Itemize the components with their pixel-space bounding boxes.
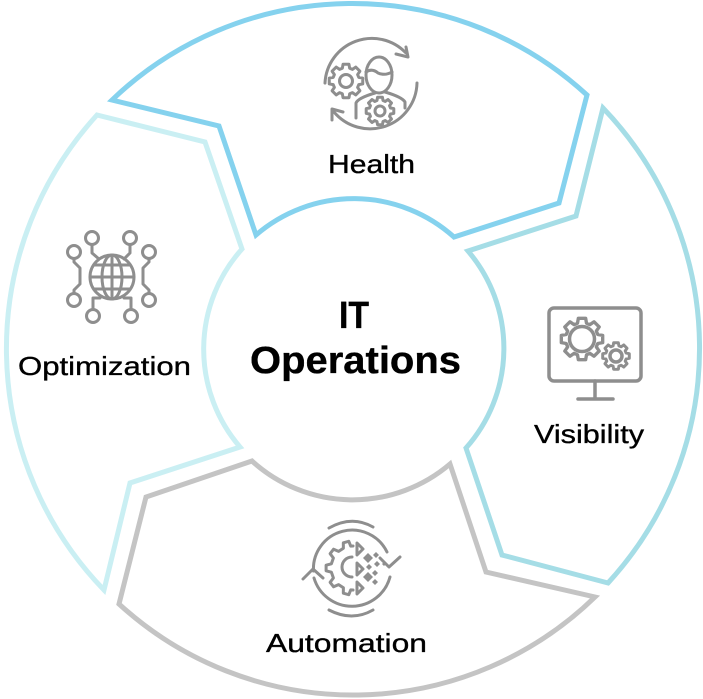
icon: health person with gears: [325, 38, 417, 129]
icon: optimization globe network: [68, 232, 156, 322]
title: Operations: [250, 340, 461, 382]
label: Optimization: Optimization: [18, 351, 191, 381]
label: Automation: Automation: [266, 628, 427, 658]
icon: automation gear cycle: [303, 521, 400, 616]
title: IT: [339, 295, 369, 337]
label: Health: Health: [328, 149, 415, 179]
icon: visibility monitor with gears: [549, 308, 641, 399]
panel: health segment: [112, 3, 587, 237]
panel: visibility segment: [466, 108, 700, 583]
panel: optimization segment: [6, 115, 242, 590]
panel: automation segment: [119, 461, 595, 695]
label: Visibility: Visibility: [534, 419, 644, 449]
title: [250, 295, 461, 382]
